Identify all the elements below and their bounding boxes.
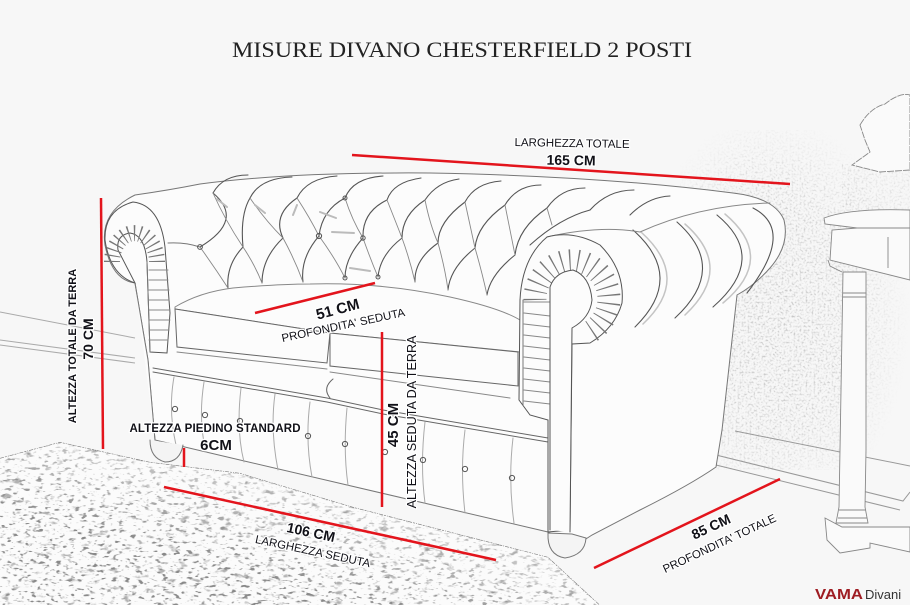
dimension: foot height: [130, 423, 300, 467]
dimension: total depth: PROFONDITA' TOTALE: [661, 513, 778, 576]
dimension: seat height: ALTEZZA SEDUTA DA TERRA: [405, 335, 419, 508]
title: MISURE DIVANO CHESTERFIELD 2 POSTI: [232, 37, 692, 62]
tufted back: [168, 175, 670, 295]
dimension: total height: ALTEZZA TOTALE DA TERRA: [67, 269, 79, 423]
logo: Divani: [865, 587, 901, 602]
dimension: total width: [352, 137, 790, 184]
background wall and floor: [0, 132, 910, 510]
dimension: total depth: 85 CM: [689, 511, 733, 542]
dimension: total depth: [594, 479, 780, 576]
sofa drawing: [104, 173, 785, 558]
dimension: seat depth: PROFONDITA' SEDUTA: [281, 307, 406, 345]
rug: [0, 440, 610, 605]
dimension: seat depth: [255, 283, 406, 345]
base rail and tufted apron: [153, 368, 548, 523]
dimension: seat width: LARGHEZZA SEDUTA: [254, 534, 372, 570]
dimension: seat width: 106 CM: [285, 519, 337, 545]
dimension: seat width: [164, 487, 496, 570]
dimension: foot height: 6CM: [200, 437, 232, 454]
dimension: foot height: ALTEZZA PIEDINO STANDARD: [130, 423, 300, 435]
right arm rolls: [547, 203, 773, 327]
logo: VAMA: [815, 586, 863, 603]
dimension: total width: LARGHEZZA TOTALE: [514, 137, 630, 151]
dimension: total width: 165 CM: [546, 152, 596, 168]
dimension: seat depth: 51 CM: [314, 296, 361, 324]
dimension: seat height: [382, 332, 419, 508]
logo: [815, 586, 901, 603]
left arm: [105, 202, 183, 462]
right arm scroll front: [519, 235, 622, 558]
sofa body: [104, 173, 785, 546]
dimension: total height: [67, 198, 103, 449]
side table with flowers: [824, 94, 910, 553]
seat cushions: [175, 284, 520, 398]
dimension: seat height: 45 CM: [385, 403, 402, 447]
dimension: total height: 70 CM: [80, 318, 96, 360]
